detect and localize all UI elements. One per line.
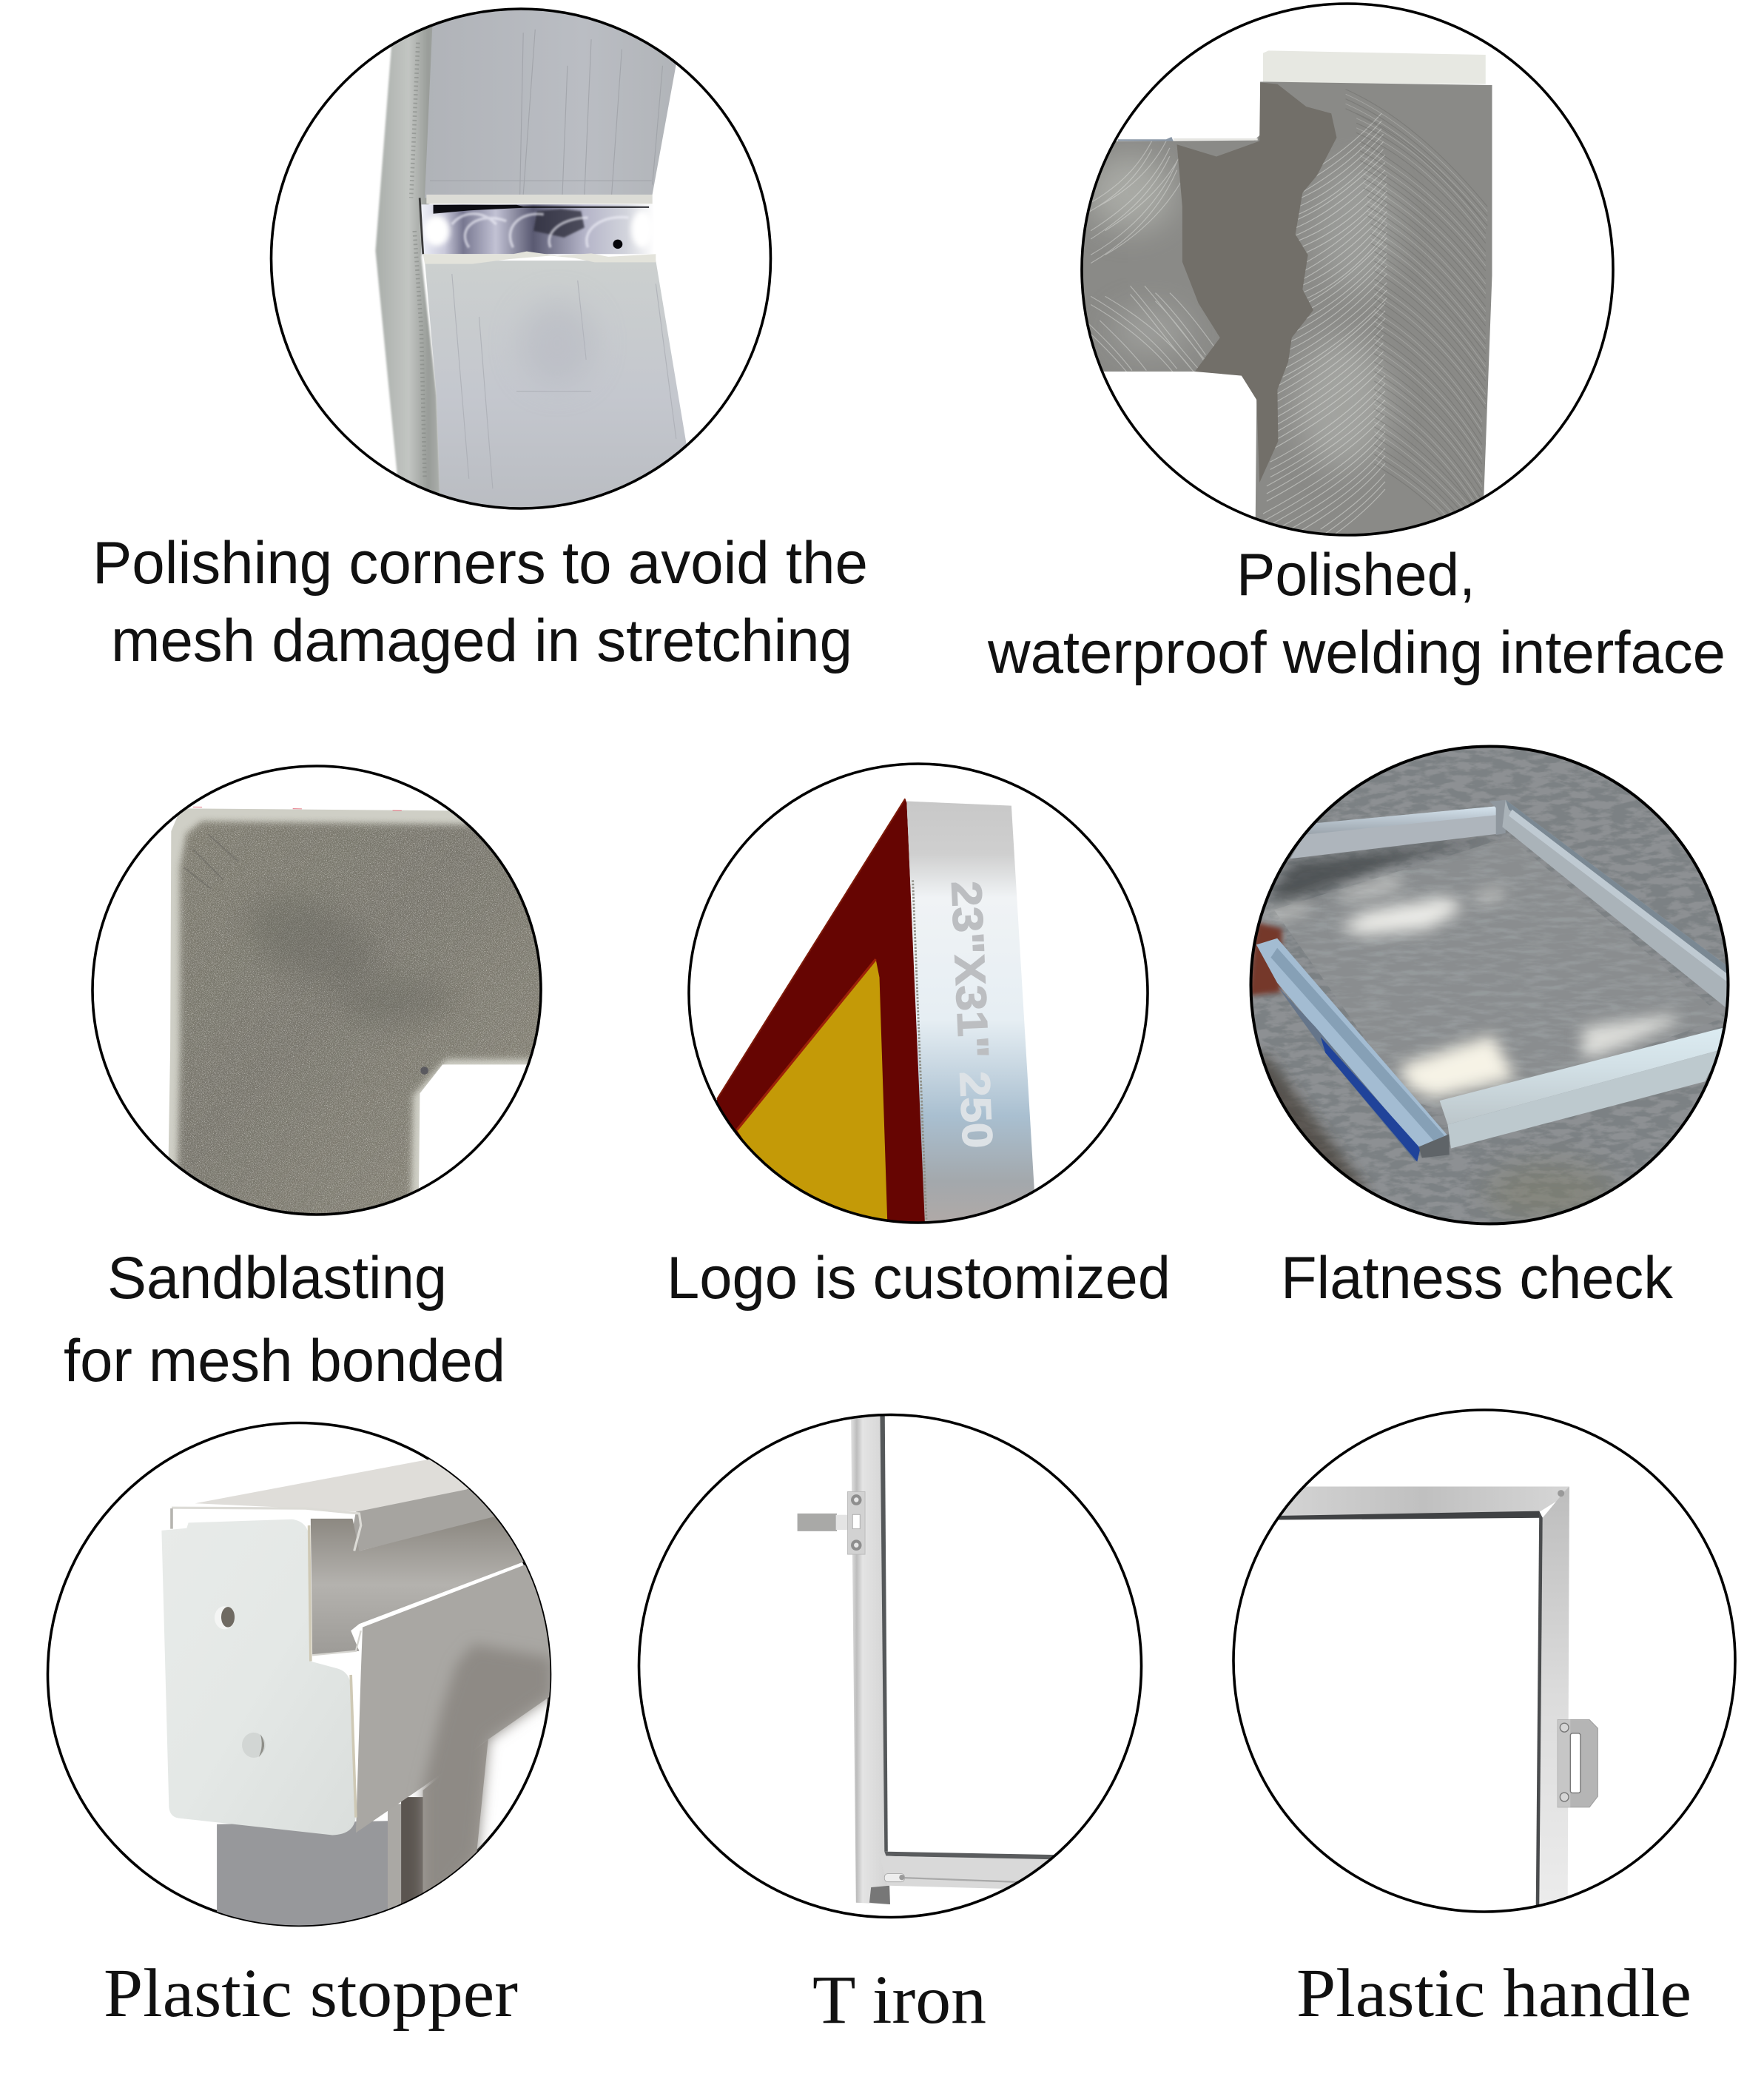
circle outline <box>639 1415 1141 1917</box>
photo: frame with T iron <box>798 1413 1060 1904</box>
circle outline <box>271 9 771 508</box>
photo: frame with engraved size <box>713 799 1036 1239</box>
caption: T iron <box>812 1962 986 2038</box>
circle outline <box>92 766 541 1215</box>
photo: welded corner seam <box>375 6 690 528</box>
panel: plastic handle <box>1233 1410 1735 2032</box>
circle outline <box>1233 1410 1735 1912</box>
panel: customized logo <box>667 764 1171 1311</box>
photo: plastic corner stopper <box>161 1460 552 1950</box>
engraved size text: 23"X31" 250 <box>942 880 1001 1149</box>
caption: Plastic stopper <box>104 1955 518 2032</box>
circle outline <box>47 1423 551 1926</box>
circle outline <box>689 764 1148 1223</box>
circle outline <box>1082 4 1613 535</box>
photo: frame on flat plate <box>1252 748 1727 1223</box>
caption: Logo is customized <box>667 1245 1171 1311</box>
photo: polished T joint <box>1058 50 1525 559</box>
panel: sandblasting <box>64 766 565 1394</box>
panel: T iron <box>639 1413 1141 2038</box>
caption <box>987 542 1726 686</box>
circle outline <box>1250 746 1728 1224</box>
caption: Sandblasting <box>107 1245 447 1311</box>
caption <box>92 530 868 674</box>
caption: Flatness check <box>1281 1245 1673 1311</box>
photo: frame with plastic handle <box>1278 1486 1598 1909</box>
panel: polishing corners <box>92 6 868 674</box>
panel: polished welding interface <box>987 4 1726 686</box>
panel: plastic stopper <box>47 1423 552 2032</box>
caption <box>64 1245 505 1394</box>
caption: mesh damaged in stretching <box>111 608 852 674</box>
caption: Polished, <box>1236 542 1475 608</box>
caption: for mesh bonded <box>64 1328 505 1394</box>
caption: Plastic handle <box>1296 1955 1691 2032</box>
caption: waterproof welding interface <box>987 619 1726 686</box>
caption: Polishing corners to avoid the <box>92 530 868 597</box>
photo: sandblasted corner <box>169 807 540 1214</box>
panel: flatness check <box>1229 731 1750 1311</box>
